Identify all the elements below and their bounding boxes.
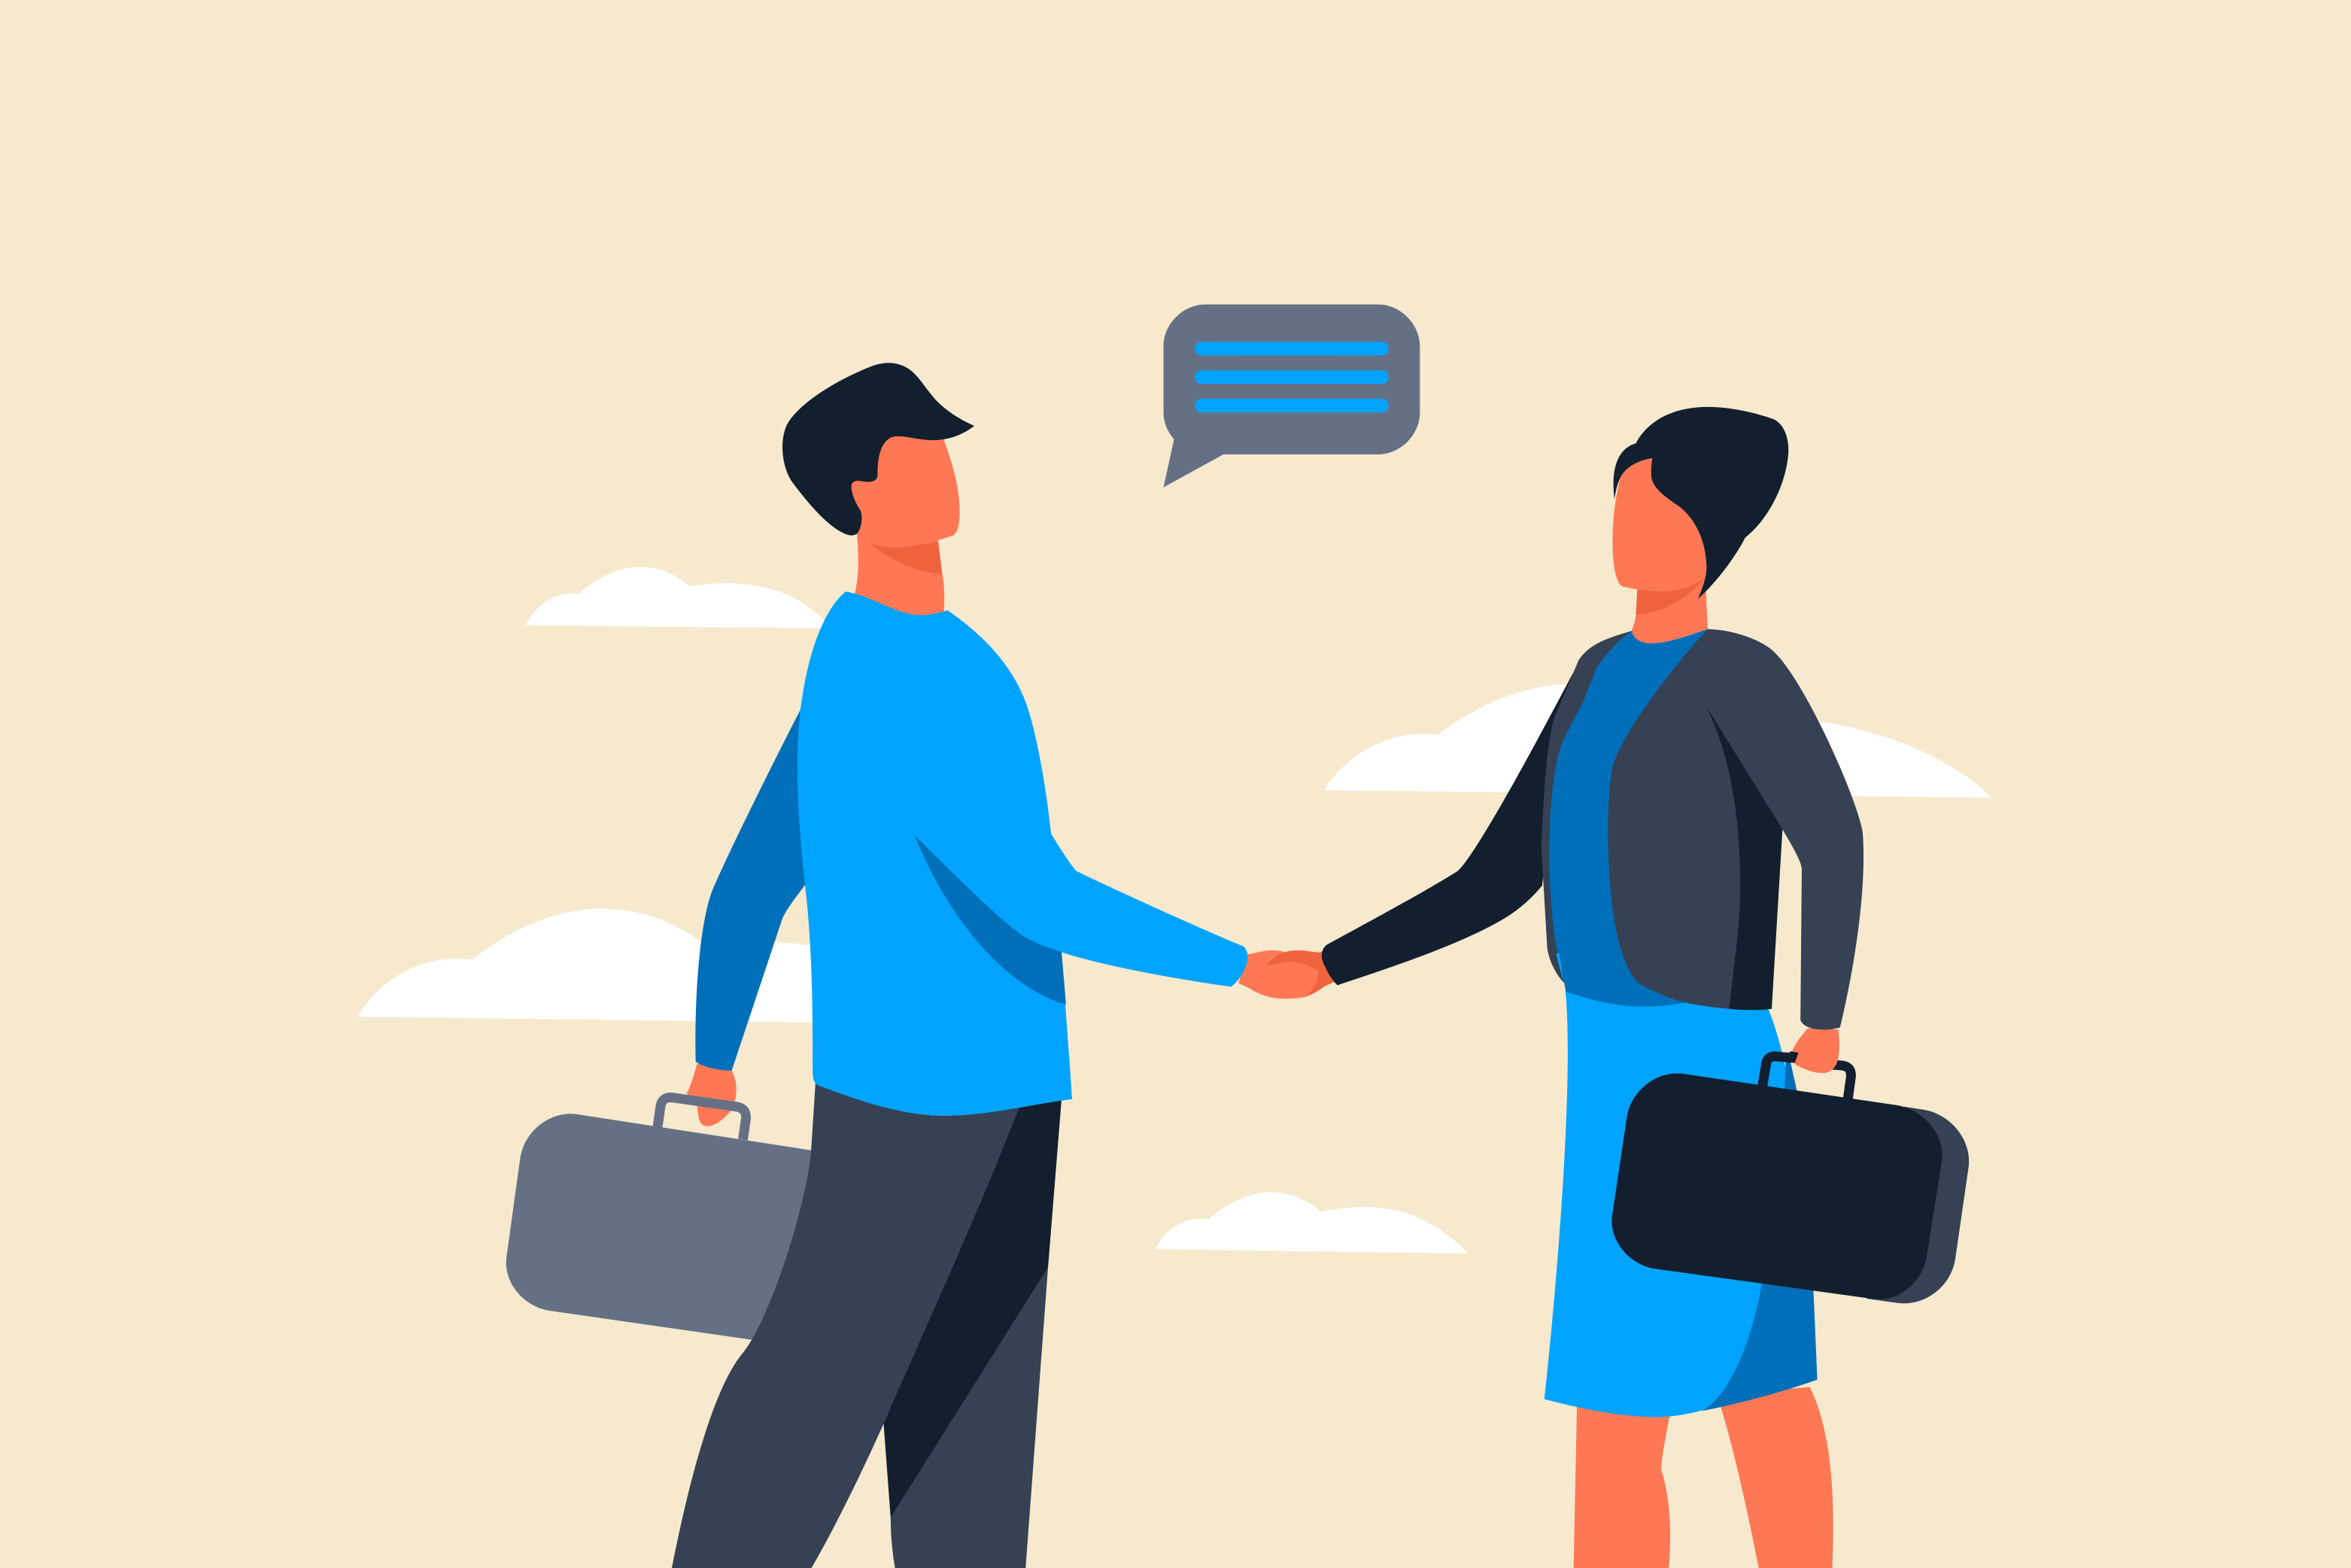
clouds — [357, 567, 1991, 1253]
woman: face — [1612, 450, 1717, 591]
woman: left leg — [1574, 1387, 1672, 1568]
man: back leg shadow — [883, 1099, 1062, 1518]
woman: front briefcase — [1611, 1074, 1942, 1299]
woman: skirt — [1545, 989, 1817, 1417]
woman: right handle — [1832, 1065, 1851, 1104]
woman: neck shadow — [1636, 577, 1706, 615]
woman: jacket — [1608, 629, 1863, 1030]
man: arm shadow — [915, 835, 1066, 1004]
woman: navy cuff — [1322, 937, 1357, 985]
man: back hand — [687, 1063, 737, 1126]
woman: left handle — [1762, 1056, 1792, 1090]
woman: navy sleeve — [1322, 673, 1573, 985]
bubble text lines — [1195, 342, 1389, 412]
man: face — [849, 427, 960, 547]
bubble body and tail — [1164, 305, 1420, 488]
handshake — [1199, 937, 1357, 998]
man: gray briefcase — [506, 1114, 840, 1348]
woman: neck — [1631, 570, 1708, 643]
cloud: right — [1324, 684, 1991, 798]
woman: jacket shadow — [1706, 707, 1782, 1010]
hand: dark hand — [1266, 950, 1334, 998]
cloud: lower left — [357, 909, 825, 1023]
speech bubble — [1164, 305, 1420, 488]
woman: back briefcase — [1867, 1107, 1969, 1303]
cloud: bottom centre — [1156, 1192, 1468, 1253]
man: back leg — [891, 1267, 1048, 1568]
man: back sleeve — [695, 710, 805, 1071]
hand: light hand — [1238, 950, 1318, 998]
man: neck — [855, 525, 944, 622]
woman: skirt fold near handle — [1785, 1051, 1798, 1098]
man: front leg — [672, 1080, 1019, 1568]
woman: thumb tip — [1788, 1051, 1799, 1063]
woman: hair — [1614, 407, 1788, 599]
man: hair — [782, 363, 974, 536]
man: briefcase handle — [658, 1098, 746, 1140]
man — [506, 363, 1247, 1568]
woman — [1322, 407, 1969, 1568]
man: blue shirt — [797, 591, 1247, 1116]
cloud: upper left — [526, 567, 834, 628]
man: blue cuff — [1199, 942, 1247, 986]
woman: right leg — [1717, 1387, 1833, 1568]
woman: dark blue shirt — [1549, 629, 1724, 1007]
man: neck shadow — [865, 538, 942, 574]
woman: blouse sliver — [1556, 953, 1563, 983]
woman: back hand — [1791, 1029, 1839, 1073]
woman: skirt shadow — [1702, 1275, 1817, 1411]
woman: jacket back strip — [1542, 631, 1634, 983]
